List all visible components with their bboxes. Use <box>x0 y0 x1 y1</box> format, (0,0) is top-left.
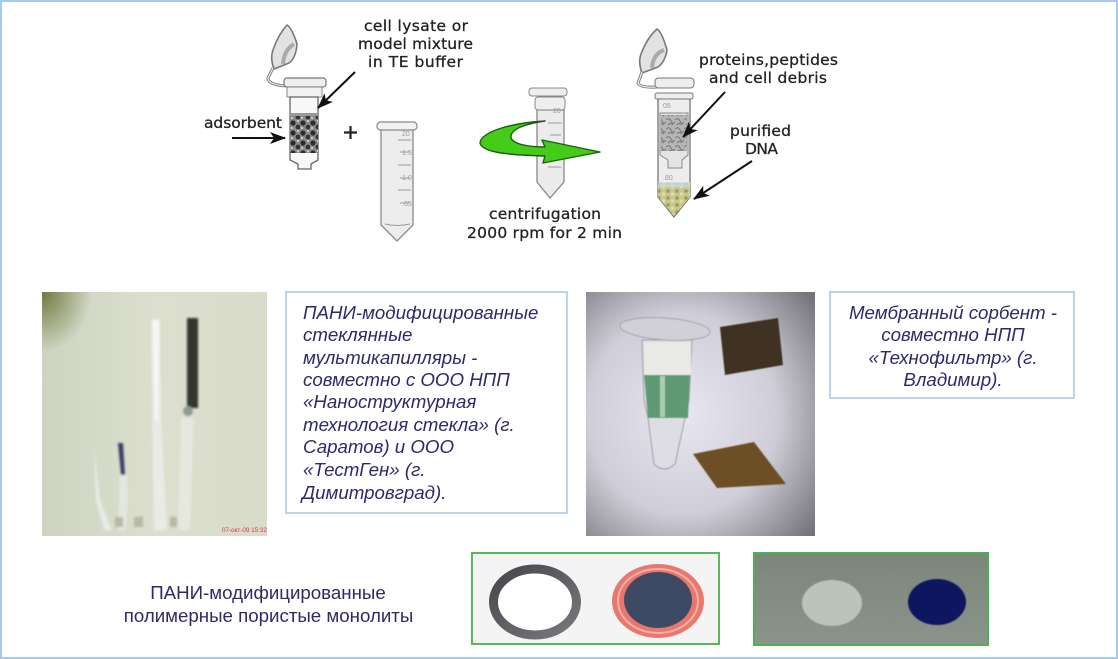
label: proteins: proteins,peptides <box>699 51 838 69</box>
arrow: to cell lysate <box>318 72 355 108</box>
label: polymer monoliths: ПАНИ-модифицированные <box>150 582 386 603</box>
disc: modified <box>612 564 704 638</box>
photo: glass multicapillaries <box>42 292 267 536</box>
panel: membrane caption <box>830 292 1074 398</box>
label: cell lysate: in TE buffer <box>368 53 464 71</box>
label: purified DNA: DNA <box>745 140 778 158</box>
label: adsorbent: adsorbent <box>204 114 282 132</box>
icon: tube with column and purified DNA <box>638 29 694 217</box>
label: purified DNA <box>730 122 791 158</box>
icon: collection tube: .05 <box>402 201 412 208</box>
panel: membrane caption: «Технофильтр» (г. <box>868 347 1038 368</box>
icon: collection tube: 1.5 <box>402 150 412 157</box>
photo: monolith discs <box>754 553 988 645</box>
icon: tube with column and purified DNA: .80 <box>663 175 673 182</box>
arrow: to proteins and debris <box>683 92 725 137</box>
ring: unmodified <box>494 569 576 635</box>
panel: capillaries caption: стеклянные <box>303 324 412 345</box>
label: cell lysate: cell lysate or <box>364 17 469 35</box>
panel: membrane caption: Мембранный сорбент - <box>849 302 1057 323</box>
icon: collection tube <box>377 122 417 241</box>
icon: collection tube: 1.0 <box>402 175 412 182</box>
panel: capillaries caption: «ТестГен» (г. <box>303 459 426 480</box>
icon: green rotation arrow <box>480 121 600 163</box>
label: cell lysate <box>358 17 473 71</box>
panel: capillaries caption: «Наноструктурная <box>303 391 476 412</box>
label: cell lysate: model mixture <box>358 35 473 53</box>
panel: capillaries caption: ПАНИ-модифицированные <box>303 302 538 323</box>
arrow: to adsorbent <box>232 137 285 139</box>
icon: spin column with adsorbent <box>268 25 326 169</box>
label: polymer monoliths: полимерные пористые монолиты <box>124 605 413 626</box>
icon: collection tube: 20 <box>402 131 410 138</box>
plus sign <box>344 126 357 139</box>
label: proteins: and cell debris <box>709 69 827 87</box>
icon: tube in centrifuge: 20 <box>553 108 561 115</box>
label: polymer monoliths <box>124 582 413 626</box>
panel: capillaries caption: Саратов) и ООО <box>303 436 454 457</box>
panel: capillaries caption <box>286 292 567 513</box>
photo: membrane sorbent with tube <box>586 292 815 536</box>
disc: blue <box>908 579 966 625</box>
icon: tube with column and purified DNA: 05 <box>663 103 671 110</box>
label: proteins <box>699 51 838 87</box>
diagram: DNA purification workflow <box>204 17 838 242</box>
panel: membrane caption: совместно НПП <box>881 324 1025 345</box>
photo timestamp: 07-окт-09 15:32 <box>222 527 267 534</box>
panel: capillaries caption: Димитровград). <box>300 482 446 503</box>
label: centrifugation: 2000 rpm for 2 min <box>467 224 622 242</box>
photo: monolith rings <box>472 553 719 644</box>
label: purified DNA: purified <box>730 122 791 140</box>
panel: capillaries caption: мультикапилляры - <box>303 347 477 368</box>
arrow: to purified DNA <box>694 161 752 199</box>
panel: capillaries caption: совместно с ООО НПП <box>303 369 510 390</box>
panel: membrane caption: Владимир). <box>903 369 1003 390</box>
label: centrifugation: centrifugation <box>489 205 601 223</box>
icon: tube in centrifuge <box>529 88 567 198</box>
disc: white <box>802 580 862 626</box>
panel: capillaries caption: технология стекла» (г. <box>303 414 515 435</box>
label: centrifugation <box>467 205 622 242</box>
